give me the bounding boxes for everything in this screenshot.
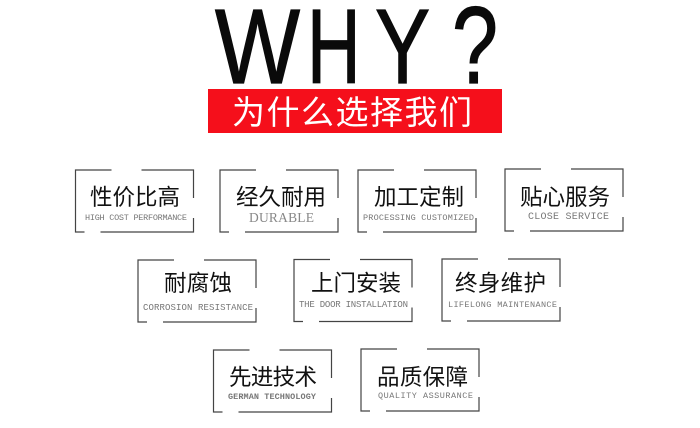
panel: german technology: 先进技术 [229, 365, 317, 390]
title: WHY? [215, 0, 498, 107]
panel: quality assurance: QUALITY ASSURANCE [378, 391, 473, 401]
subtitle banner [208, 89, 502, 133]
panel: lifelong maintenance: 终身维护 [455, 271, 546, 296]
panel: processing customized [358, 170, 476, 232]
panel: german technology [214, 350, 332, 412]
panel: corrosion resistance: 耐腐蚀 [164, 271, 232, 296]
panel: quality assurance [361, 349, 479, 411]
panel: corrosion resistance [138, 260, 256, 322]
panel: corrosion resistance: CORROSION RESISTANCE [143, 303, 253, 313]
panel: close service: 贴心服务 [520, 185, 610, 210]
panel: processing customized: 加工定制 [374, 185, 464, 210]
panel: door installation: 上门安装 [311, 271, 401, 296]
panel: lifelong maintenance [442, 259, 560, 321]
panel: door installation: THE DOOR INSTALLATION [299, 300, 408, 310]
panel: close service [505, 169, 623, 231]
panel: high cost performance [76, 170, 194, 232]
panel: quality assurance: 品质保障 [377, 365, 468, 390]
panel: close service: CLOSE SERVICE [528, 212, 609, 223]
panel: german technology: GERMAN TECHNOLOGY [228, 392, 317, 402]
panel: door installation [294, 260, 412, 322]
panel: high cost performance: 性价比高 [90, 185, 180, 210]
panel: high cost performance: HIGH COST PERFORMANCE [85, 213, 187, 223]
panel: processing customized: PROCESSING CUSTOMIZED [363, 213, 474, 223]
panel: durable: DURABLE [249, 210, 314, 225]
panel: durable [220, 170, 338, 232]
subtitle banner: 为什么选择我们 [232, 94, 472, 131]
panel: durable: 经久耐用 [236, 185, 326, 210]
panel: lifelong maintenance: LIFELONG MAINTENANCE [448, 300, 557, 310]
